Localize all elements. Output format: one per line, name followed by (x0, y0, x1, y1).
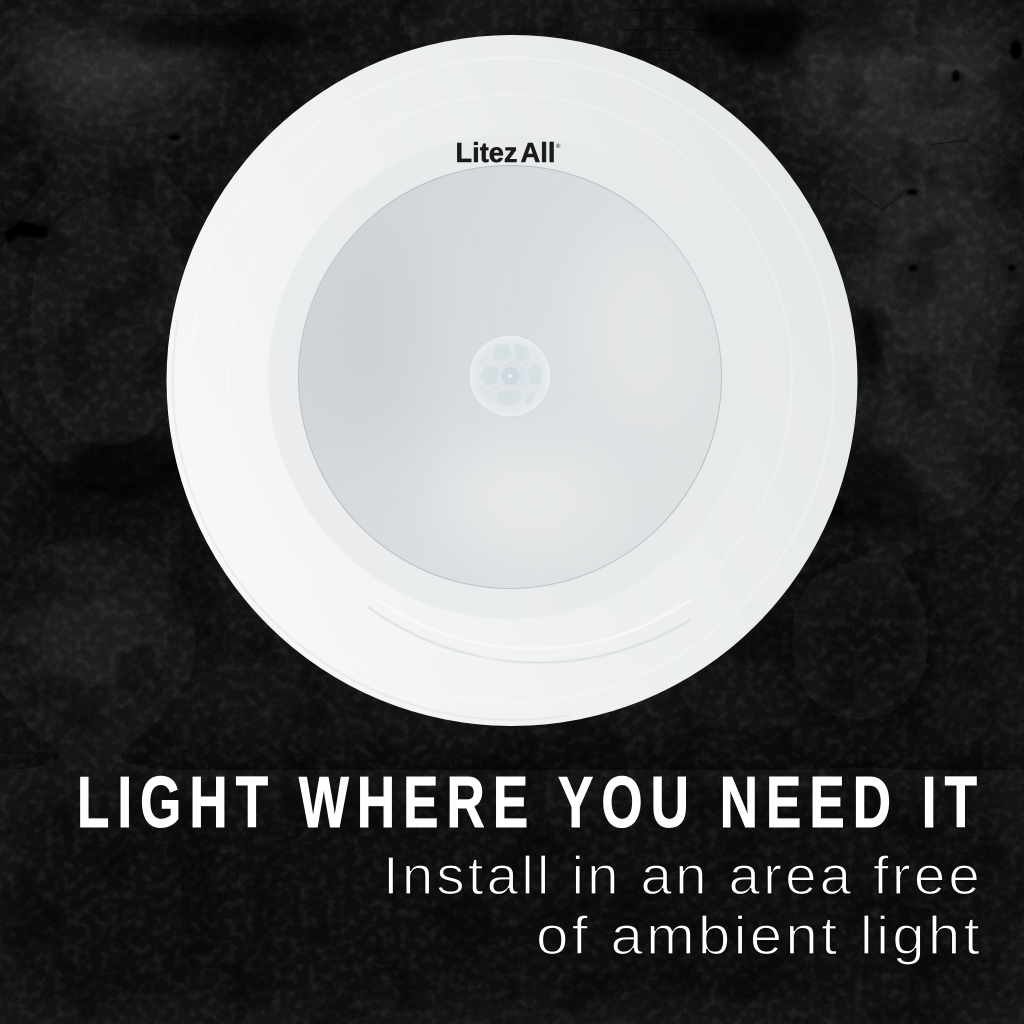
brand logo: Litez (456, 137, 518, 168)
housing grooves (173, 58, 834, 720)
subheading line 2: of ambient light (536, 906, 983, 966)
recessed ring around lens (268, 135, 752, 619)
outer white housing (166, 35, 858, 726)
brand logo: All (520, 137, 556, 168)
subheading (383, 846, 983, 966)
PIR sensor dome (469, 335, 551, 417)
subheading line 1: Install in an area free (383, 846, 983, 906)
brand logo (456, 137, 561, 168)
brand logo: ® (556, 143, 561, 150)
product: round motion sensor light (166, 35, 858, 726)
frosted light diffuser (298, 165, 722, 589)
